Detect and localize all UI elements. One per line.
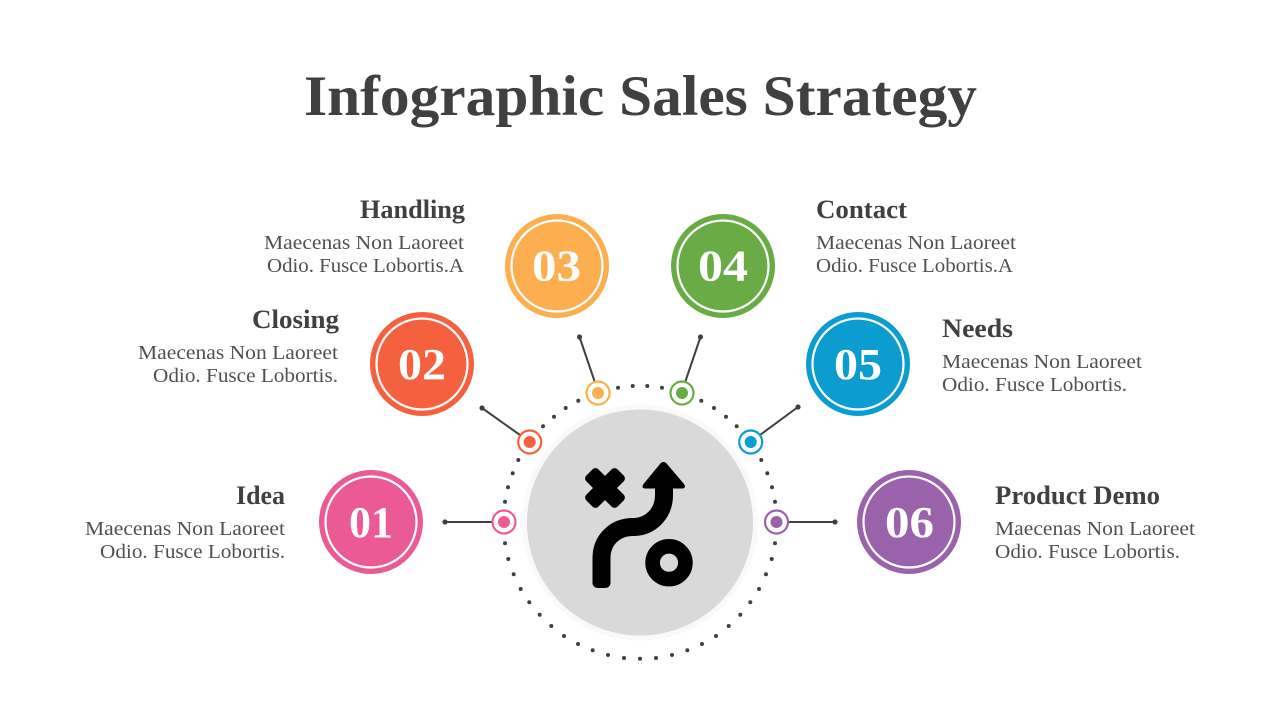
text block: Handling: Handling (360, 195, 465, 224)
connector 04 (670, 334, 703, 404)
text block: Closing: Odio. Fusce Lobortis. (153, 365, 338, 387)
text block: Idea: Odio. Fusce Lobortis. (100, 541, 285, 563)
text block: Product Demo: Maecenas Non Laoreet (995, 518, 1195, 540)
badge 03 (505, 214, 609, 318)
text block: Contact: Maecenas Non Laoreet (816, 232, 1016, 254)
badge 02: 02 (398, 340, 446, 389)
text block: Idea: Idea (236, 481, 285, 510)
text block: Contact (816, 195, 1016, 277)
text block: Needs: Needs (942, 314, 1013, 343)
badge 04 (671, 214, 775, 318)
central disc (522, 404, 758, 640)
badge 01 (319, 470, 423, 574)
text block: Contact: Odio. Fusce Lobortis.A (816, 255, 1013, 277)
text block: Product Demo: Odio. Fusce Lobortis. (995, 541, 1180, 563)
badge 02 (370, 312, 474, 416)
badge 04: 04 (698, 242, 748, 290)
text block: Handling: Odio. Fusce Lobortis.A (267, 255, 464, 277)
text block: Closing: Closing (252, 305, 339, 334)
text block: Contact: Contact (816, 195, 907, 224)
text block: Product Demo: Product Demo (995, 481, 1160, 510)
text block: Handling (264, 195, 465, 277)
badge 06: 06 (885, 498, 934, 547)
text block: Idea (85, 481, 285, 563)
badge 05 (806, 312, 910, 416)
text block: Needs: Maecenas Non Laoreet (942, 351, 1142, 373)
badge 03: 03 (532, 242, 581, 290)
connector 03 (577, 334, 610, 404)
connector 05 (739, 404, 801, 454)
title: Infographic Sales Strategy (304, 65, 977, 128)
text block: Product Demo (995, 481, 1195, 563)
text block: Needs: Odio. Fusce Lobortis. (942, 374, 1127, 396)
text block: Closing: Maecenas Non Laoreet (138, 342, 338, 364)
text block: Closing (138, 305, 339, 387)
badge 06 (857, 470, 961, 574)
text block: Needs (942, 314, 1142, 396)
badge 01: 01 (349, 498, 393, 547)
connector 06 (765, 510, 838, 534)
text block: Idea: Maecenas Non Laoreet (85, 518, 285, 540)
text block: Handling: Maecenas Non Laoreet (264, 232, 464, 254)
icon: strategy play (583, 462, 685, 588)
connector 01 (442, 510, 516, 534)
dotted ring (503, 384, 777, 661)
connector 02 (479, 405, 541, 454)
badge 05: 05 (834, 340, 882, 389)
